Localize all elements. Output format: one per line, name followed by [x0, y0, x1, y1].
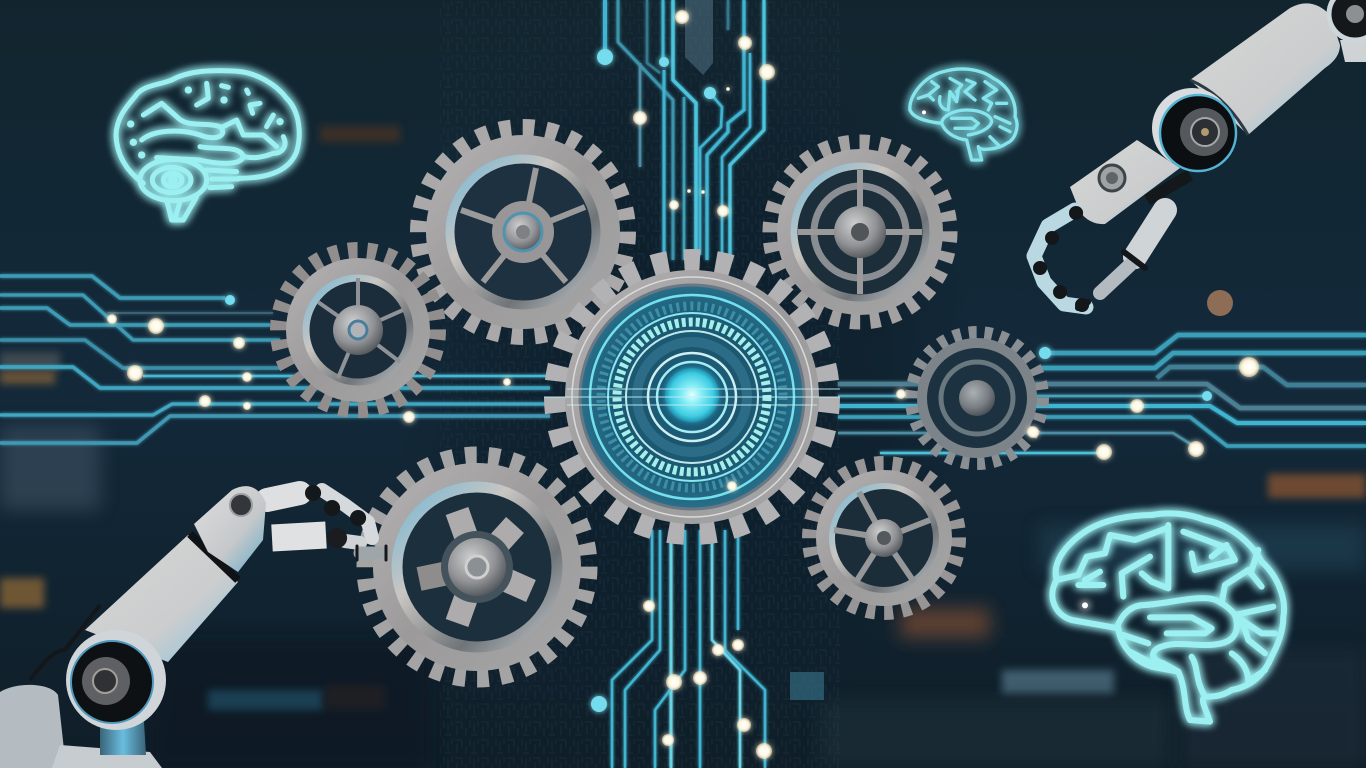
circuit board centre — [395, 0, 975, 768]
brain: upper left — [116, 71, 299, 220]
gear: bottom left large — [366, 456, 588, 678]
central glowing gear — [544, 261, 840, 533]
upper fingers — [267, 490, 386, 560]
gear: right — [912, 333, 1042, 463]
forearm — [85, 535, 238, 662]
hub — [441, 531, 513, 603]
spokes — [461, 168, 585, 282]
palm section — [194, 486, 266, 572]
spokes — [834, 492, 930, 582]
wrist sensor — [1099, 165, 1125, 191]
core — [665, 368, 719, 422]
dial — [580, 285, 804, 509]
hub — [333, 305, 383, 355]
teeth — [556, 261, 828, 533]
left finger — [1034, 210, 1086, 307]
hub — [865, 519, 903, 557]
horizontal circuit traces left — [0, 276, 550, 443]
gear: lower right — [810, 464, 958, 612]
cable — [30, 605, 100, 680]
vertical circuit traces bottom — [612, 530, 765, 768]
vertical circuit traces top — [605, 0, 764, 260]
spokes — [798, 170, 922, 294]
ghost trace shape — [685, 0, 713, 75]
brain: lower right — [1052, 513, 1284, 722]
right finger — [1078, 210, 1165, 308]
wrist section — [1070, 140, 1180, 224]
knuckle block — [1147, 175, 1190, 200]
hub — [492, 201, 554, 263]
gear: upper left large — [419, 128, 627, 336]
brain: upper right small — [910, 69, 1017, 160]
gear: left — [279, 251, 437, 409]
gear: upper right — [771, 143, 949, 321]
robot arm: top right — [1034, 0, 1366, 308]
forearm cylinder — [1190, 3, 1340, 135]
elbow joint — [1152, 88, 1236, 171]
horizontal circuit traces right — [838, 335, 1366, 453]
hub — [834, 206, 886, 258]
elbow joint — [66, 630, 166, 730]
base shoulder — [0, 685, 66, 768]
shoulder joint — [1329, 0, 1366, 62]
hub — [959, 380, 995, 416]
robot arm: bottom left — [0, 486, 386, 768]
spokes — [419, 511, 531, 623]
spokes — [318, 278, 403, 378]
